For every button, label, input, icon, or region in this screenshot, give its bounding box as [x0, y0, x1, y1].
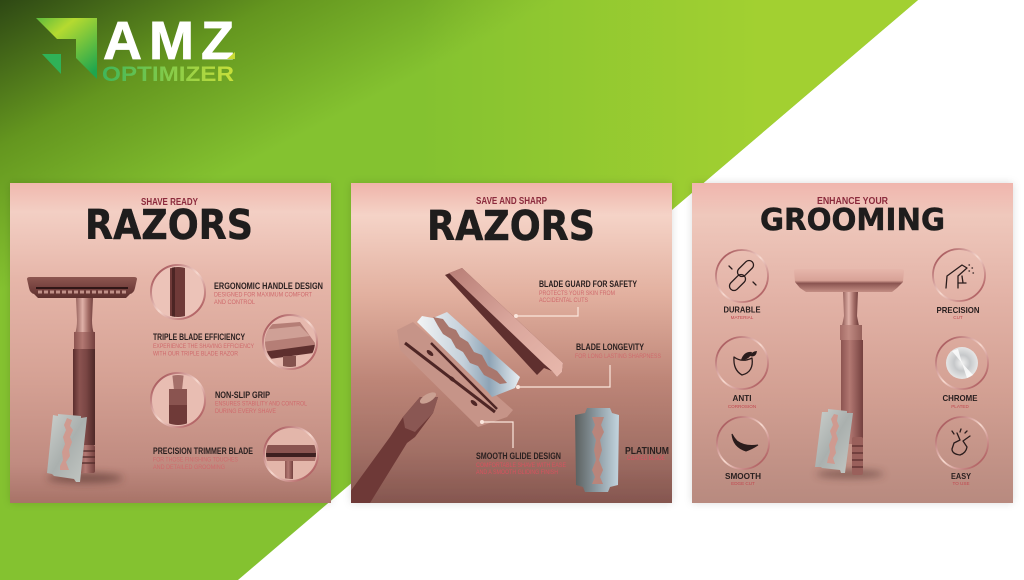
- heading: grooming: GROOMING: [760, 203, 945, 238]
- feature: smooth edge cut: SMOOTH: [725, 471, 761, 481]
- exploded razor: [350, 268, 563, 503]
- callout: smooth glide design: COMFORTABLE SHAVE WITH EASE: [476, 462, 566, 469]
- feature: durable material: MATERIAL: [731, 315, 754, 320]
- heading: razors: RAZORS: [85, 201, 253, 249]
- feature: precision cut: CUT: [953, 315, 963, 320]
- feature: durable material: DURABLE: [724, 304, 761, 314]
- label: platinum: COATED BLADE: [627, 455, 665, 462]
- callout: smooth glide design: SMOOTH GLIDE DESIGN: [476, 451, 561, 461]
- callout: blade longevity: FOR LONG LASTING SHARPNESS: [575, 353, 661, 360]
- label: save and sharp: SAVE AND SHARP: [476, 196, 547, 207]
- callout: triple blade efficiency: [153, 315, 320, 370]
- feature: easy to use: EASY: [951, 471, 971, 481]
- callout: ergonomic handle design: DESIGNED FOR MAXIMUM COMFORT: [214, 292, 312, 298]
- panel: enhance your grooming: [692, 183, 1013, 503]
- feature: precision cut: [933, 249, 985, 320]
- feature: precision cut: PRECISION: [936, 305, 980, 315]
- blade: platinum coated: [575, 408, 619, 492]
- callout: smooth glide design: [476, 420, 566, 476]
- panel: save and sharp razors: [350, 183, 672, 503]
- logo: AMZ Optimizer: [36, 11, 235, 86]
- callout: blade guard for safety: PROTECTS YOUR SKIN FROM: [539, 290, 615, 297]
- logo: AMZ Optimizer: AMZ: [103, 11, 234, 71]
- callout: blade longevity: [516, 342, 661, 389]
- heading: razors: RAZORS: [427, 202, 595, 250]
- feature: smooth edge cut: [717, 417, 769, 486]
- label: platinum: [625, 446, 669, 462]
- feature: durable material: [716, 250, 768, 320]
- callout: ergonomic handle design: [151, 262, 323, 322]
- callout: precision trimmer blade: [153, 427, 322, 481]
- callout: blade longevity: BLADE LONGEVITY: [576, 342, 644, 352]
- callout: precision trimmer blade: FOR THOSE FINISHING TOUCHES: [153, 456, 238, 464]
- panel: shave ready razors: [10, 183, 331, 503]
- feature: easy to use: [936, 417, 988, 486]
- feature: anti corrosion: CORROSION: [728, 404, 756, 409]
- label: enhance your: ENHANCE YOUR: [817, 196, 889, 207]
- callout: non-slip grip: ENSURES STABILITY AND CONTROL: [215, 400, 307, 408]
- callout: blade guard for safety: BLADE GUARD FOR SAFETY: [539, 279, 637, 289]
- callout: triple blade efficiency: EXPERIENCE THE SHAVING EFFICIENCY: [153, 343, 254, 350]
- feature: smooth edge cut: EDGE CUT: [731, 481, 755, 486]
- callout: non-slip grip: [151, 372, 307, 427]
- feature: anti corrosion: ANTI: [732, 393, 752, 403]
- callout: blade guard for safety: [514, 279, 637, 318]
- razor with blade: [27, 277, 137, 483]
- callout: blade guard for safety: ACCIDENTAL CUTS: [539, 297, 588, 304]
- feature: chrome plated: PLATED: [951, 404, 969, 409]
- feature: anti corrosion: [716, 337, 768, 409]
- logo: AMZ Optimizer: OPTIMIZER: [102, 63, 234, 86]
- feature: chrome plated: CHROME: [942, 393, 978, 403]
- feature: chrome plated: [936, 337, 988, 409]
- callout: smooth glide design: AND A SMOOTH GLIDING FINISH: [476, 469, 558, 476]
- razor with blade: [794, 269, 904, 478]
- callout: ergonomic handle design: ERGONOMIC HANDLE DESIGN: [214, 281, 323, 291]
- callout: non-slip grip: NON-SLIP GRIP: [215, 390, 270, 400]
- callout: precision trimmer blade: AND DETAILED GROOMING: [153, 464, 225, 471]
- callout: triple blade efficiency: WITH OUR TRIPLE BLADE RAZOR: [153, 350, 238, 358]
- callout: ergonomic handle design: AND CONTROL: [214, 299, 255, 306]
- callout: precision trimmer blade: PRECISION TRIMMER BLADE: [153, 446, 253, 456]
- feature: easy to use: TO USE: [952, 481, 970, 486]
- label: shave ready: SHAVE READY: [141, 197, 198, 208]
- callout: non-slip grip: DURING EVERY SHAVE: [215, 408, 276, 415]
- label: platinum: PLATINUM: [625, 446, 669, 457]
- callout: triple blade efficiency: TRIPLE BLADE EFFICIENCY: [153, 332, 245, 342]
